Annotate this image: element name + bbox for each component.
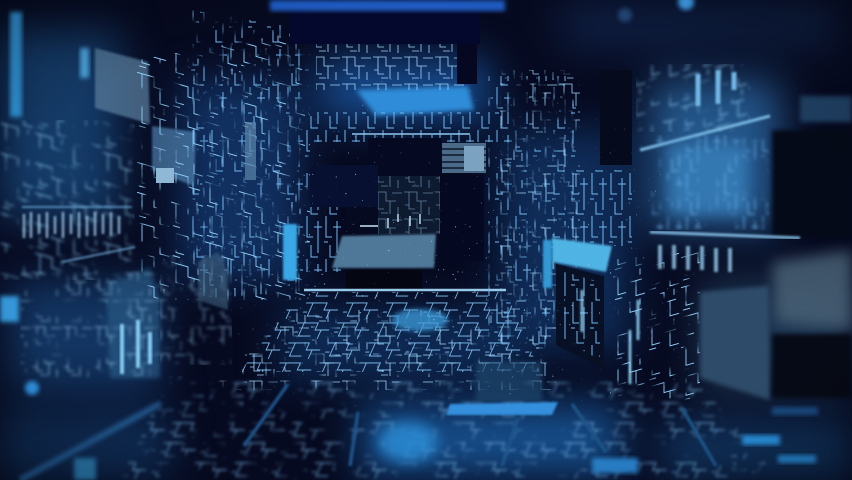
glow dot: left edge [0, 296, 19, 322]
ledge line: right mid [650, 232, 800, 238]
glow bars: tower [582, 290, 638, 384]
dark tile: centre left [310, 165, 378, 207]
glow dot: top right [678, 0, 694, 10]
circuit block: right inner window [568, 170, 632, 246]
glow bars: upper right [698, 70, 734, 106]
pale dome: tower top [198, 252, 228, 310]
dark void: ceiling opening [290, 12, 480, 44]
circuit block: right wall centre [650, 135, 770, 230]
glow dot: top mid [618, 8, 632, 22]
bright dashes: centre [360, 214, 420, 228]
stripes: back wall tile [442, 149, 486, 168]
panel: tunnel centre [210, 70, 580, 390]
circuit block: lower tower [160, 255, 232, 365]
panel: floor foreground [74, 376, 818, 480]
glow dot: lower-left [25, 381, 39, 395]
blurred grey screen: lower right [700, 286, 770, 400]
pale tile: back wall striped [442, 143, 486, 173]
dark void: centre right [440, 175, 484, 261]
pale reflection: floor [476, 362, 542, 402]
circuit block: tower inset [564, 272, 600, 360]
dark notch: ceiling [457, 44, 477, 84]
diagonal beams: floor [244, 384, 716, 466]
glow panel: cyan tower strip [283, 224, 297, 280]
floor line: far [304, 289, 506, 291]
blurred foreground block: lower-left [106, 268, 160, 378]
dark void: far-right [772, 130, 852, 238]
bar code row: left ledge [24, 212, 119, 238]
circuit block: far-left blurred traces [0, 120, 135, 280]
ledge line: upper right [640, 116, 770, 150]
circuit block: lower-left blurred traces [20, 270, 160, 380]
circuit block: side panel [300, 206, 342, 272]
glow bar: floor cyan [446, 402, 558, 415]
circuit block: far floor [240, 292, 540, 372]
pale marker: small tile [156, 168, 174, 183]
circuit block: back wall [310, 112, 510, 142]
panel: left wall [0, 12, 196, 480]
panel: inner-left tower [136, 10, 342, 365]
panel: right inner tower [476, 70, 700, 402]
glow dot: lower-left floor [74, 458, 96, 480]
dark void: under slab [346, 270, 422, 289]
circuit block: right tower face [610, 250, 700, 400]
pale marker: vertical tile [245, 122, 256, 180]
glow strip: top bright edge [270, 0, 505, 11]
glow cloud: floor [392, 309, 448, 331]
panel: top centre [270, 0, 510, 173]
block: dark tower face [556, 264, 604, 370]
glow strip: far-left edge [10, 12, 22, 117]
circuit block: right wall traces [636, 64, 751, 132]
glow bar: upper right floor [772, 407, 818, 415]
panel: right wall [618, 0, 852, 400]
blurred grey slab: far right [772, 250, 852, 330]
circuit block: ceiling [316, 44, 464, 90]
glow ledge: cyan [552, 238, 612, 272]
panel: upper-left pale screen [95, 48, 150, 124]
glow bar: right floor [742, 435, 780, 445]
glow patch: floor lights [592, 458, 638, 473]
blurred foreground: far right top [800, 96, 852, 122]
circuit block: right of centre overlay [500, 70, 580, 350]
dark void: upper right gap [600, 70, 632, 165]
sparkle particles [140, 53, 741, 432]
glow patch: right wall centre [668, 145, 748, 215]
circuit tile: detail [378, 176, 440, 234]
circuit block: tower overlay [190, 10, 310, 300]
glow bars: lower-left [122, 320, 150, 374]
circuit tile: centre block [378, 176, 440, 234]
circuit block: right of centre [486, 76, 576, 346]
dark void: centre back [368, 138, 442, 178]
glow patch: floor centre [378, 422, 438, 462]
panel: mid-left pale screen [152, 126, 196, 186]
circuit block: far floor overlay [210, 310, 560, 390]
dark void: lower far right [772, 334, 852, 398]
pale slab: centre [332, 234, 436, 268]
circuit block: near floor [120, 376, 780, 480]
bars: right mid [660, 245, 730, 272]
glow bar: far-right floor [778, 455, 816, 463]
glow patch: ceiling light [356, 86, 474, 116]
pale tile: small bright block [464, 146, 484, 171]
glow strip: cyan left [543, 240, 552, 288]
ledge line: left [22, 207, 135, 262]
glow strip: left cyan column [80, 48, 89, 78]
ledge line: ceiling [352, 133, 470, 135]
circuit block: tower face [136, 30, 310, 300]
foreground beam: lower-left [20, 404, 160, 480]
